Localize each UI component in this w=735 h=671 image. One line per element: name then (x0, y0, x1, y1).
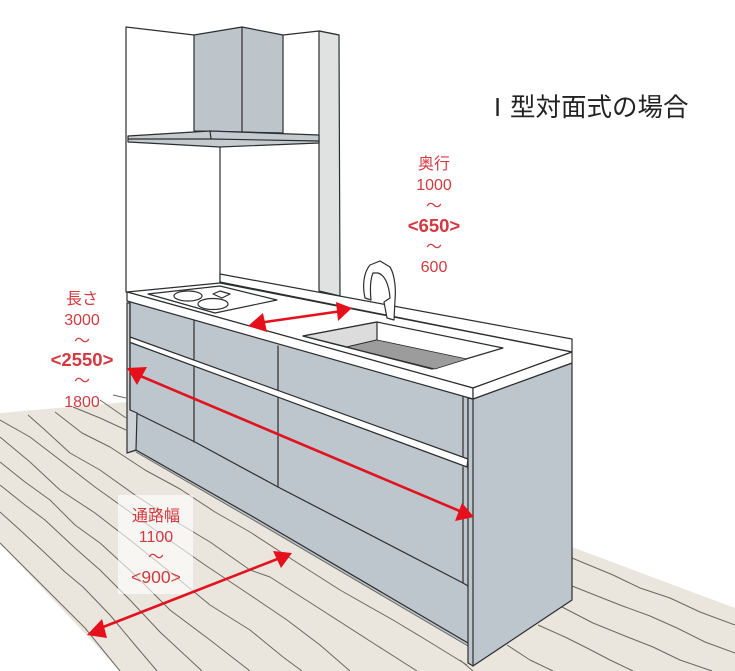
label: depth (408, 155, 460, 276)
cooktop (148, 286, 277, 313)
label: length (51, 290, 114, 411)
label: depth: 1000 (416, 177, 452, 194)
label: length: ～ (74, 373, 90, 390)
label: aisle width: 通路幅 (132, 507, 180, 525)
floor (0, 395, 735, 671)
label: aisle width: <900> (131, 567, 181, 587)
label: depth: ～ (426, 198, 442, 215)
label: aisle width: ～ (148, 549, 164, 566)
side panel edge (472, 399, 474, 666)
faucet (364, 261, 395, 320)
cabinet front (127, 300, 470, 663)
label: depth: 600 (421, 259, 447, 276)
label: length: 長さ (66, 290, 98, 308)
label: aisle width: 1100 (139, 529, 173, 546)
label: length: ～ (74, 333, 90, 350)
arrow: depth (248, 302, 352, 332)
arrow: length (127, 367, 474, 521)
title: 型対面式の場合 (510, 94, 689, 122)
cabinet side panel (468, 363, 572, 666)
label: length: 3000 (64, 312, 100, 329)
label: length: 1800 (64, 394, 100, 411)
label: aisle width (131, 507, 181, 587)
plinth leg (127, 303, 137, 453)
range hood (128, 27, 319, 147)
label: length: <2550> (51, 349, 114, 370)
title: I (494, 94, 501, 122)
label: depth: <650> (408, 215, 460, 236)
label: depth: ～ (426, 239, 442, 256)
wall and pillar (126, 27, 340, 296)
label: depth: 奥行 (418, 155, 450, 173)
countertop (127, 283, 572, 399)
handle rail (129, 337, 468, 467)
label background: aisle (118, 495, 193, 594)
backsplash ledge (220, 274, 572, 352)
arrow: aisle width (87, 551, 292, 638)
sink (303, 322, 503, 369)
